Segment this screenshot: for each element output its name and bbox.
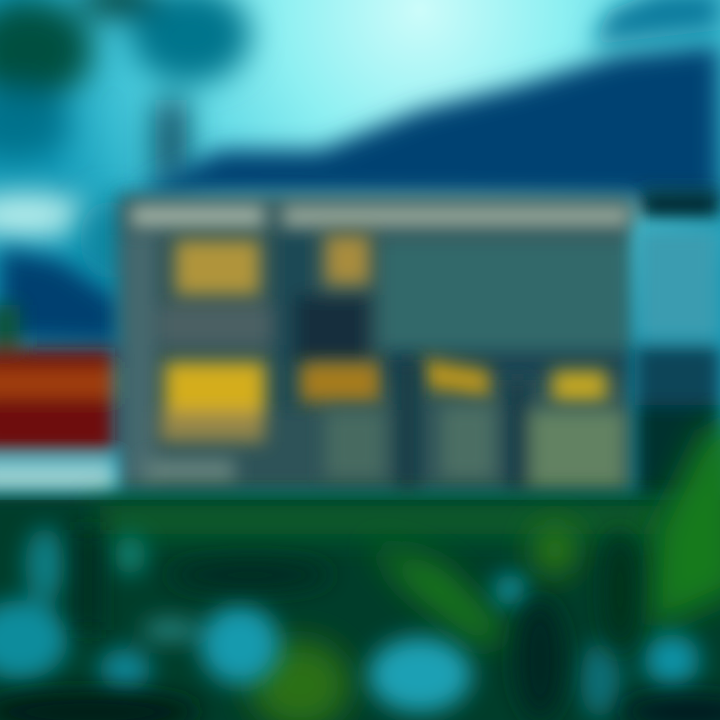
sky	[0, 0, 720, 500]
house: roof band	[130, 190, 720, 227]
lit windows	[160, 235, 607, 442]
foliage: teal leaves	[0, 527, 700, 718]
red building on left	[0, 305, 115, 496]
foliage: dark shadows	[0, 530, 720, 720]
house: body	[118, 195, 633, 495]
lawn	[0, 495, 720, 720]
foliage: green leaves	[250, 420, 720, 720]
lower windows and doors	[145, 360, 625, 490]
mountains	[0, 0, 720, 345]
side building	[635, 228, 720, 505]
trees: top left foliage	[0, 0, 250, 180]
